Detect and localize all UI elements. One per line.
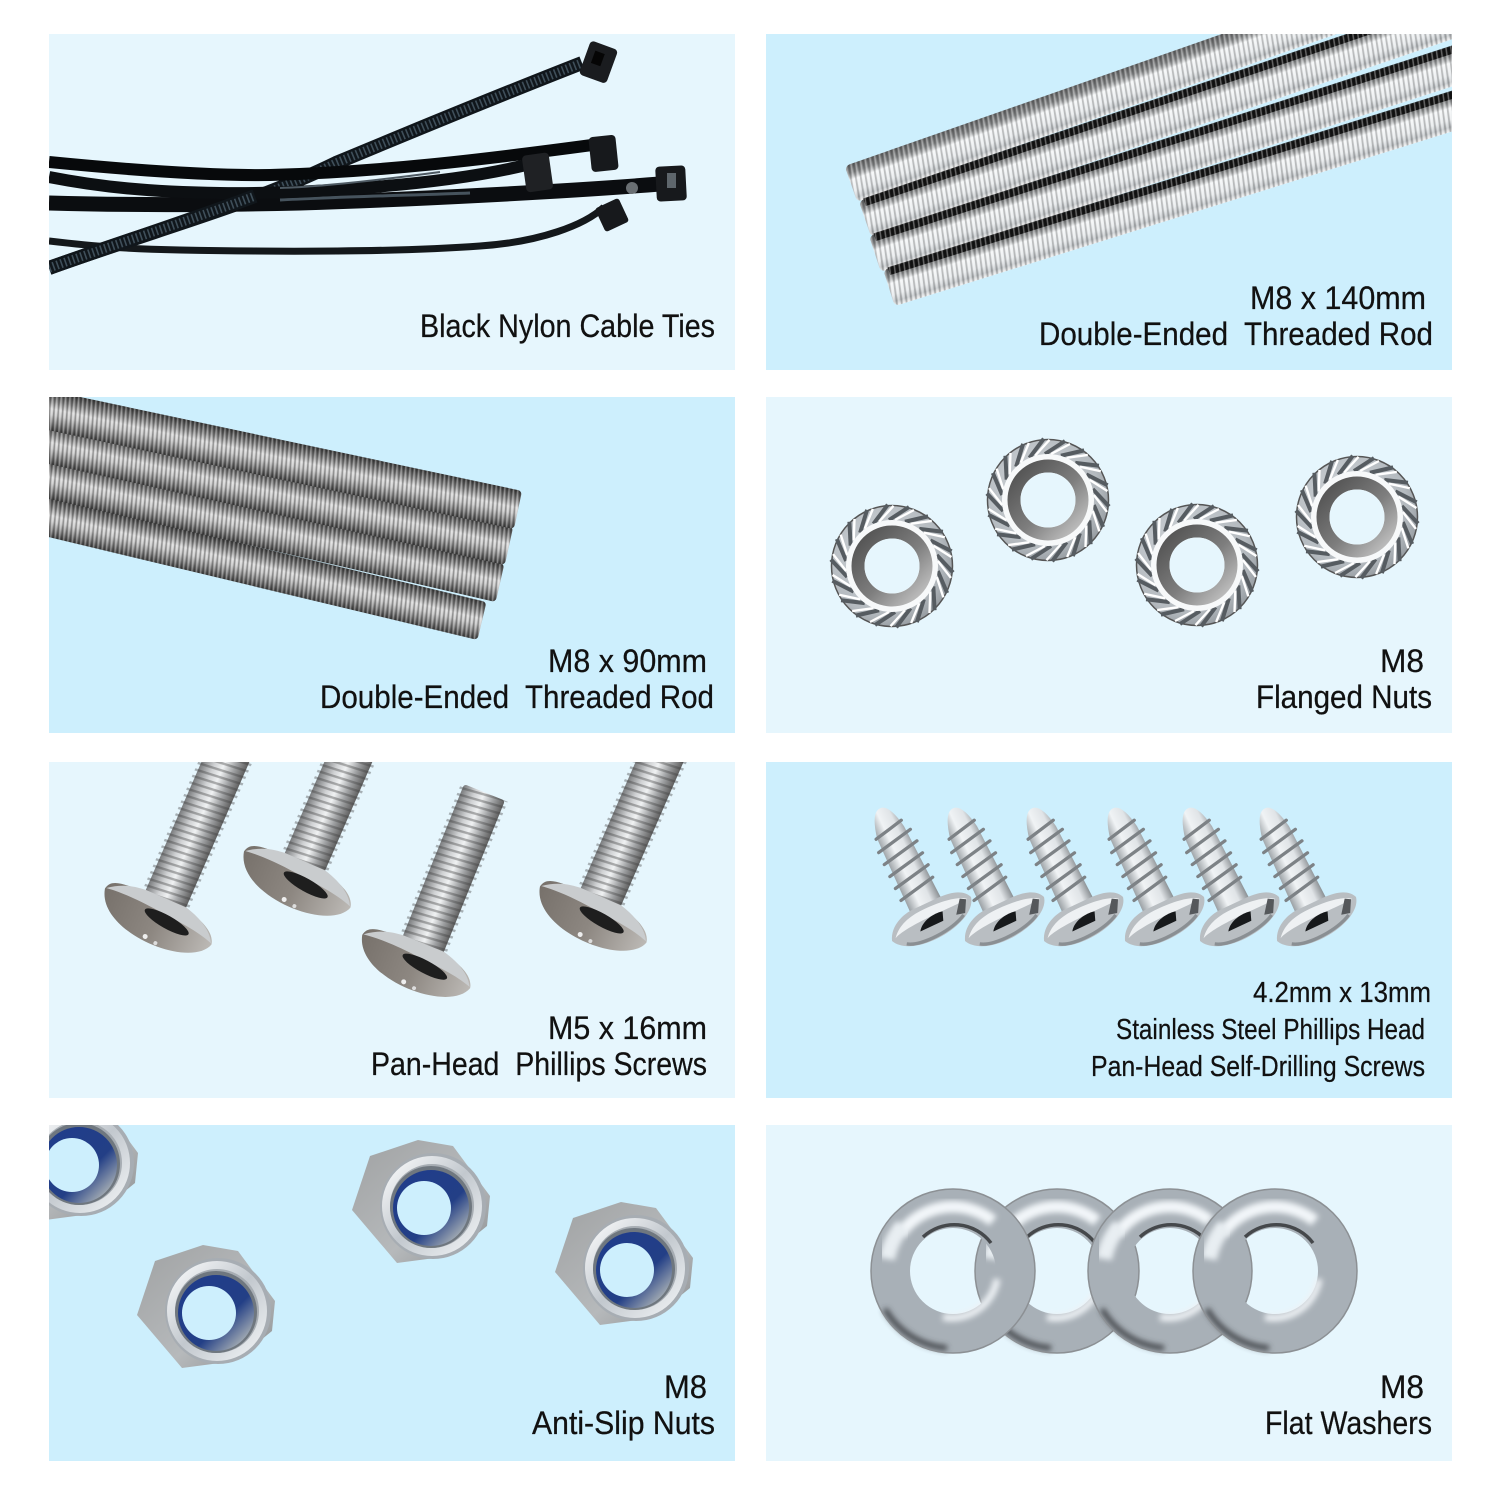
icon: self-drilling screw 5 — [1147, 789, 1289, 956]
icon: flanged nut 4 — [1295, 454, 1419, 580]
icon: flanged nut 1 — [830, 503, 954, 629]
panel background — [766, 762, 1452, 1098]
icon: screw 1 — [104, 762, 252, 953]
label: 4.2mm x 13mm: 4.2mm x 13mm — [1253, 977, 1431, 1009]
icon: screw 3 — [362, 785, 508, 997]
icon: self-drilling screw 2 — [912, 789, 1054, 956]
panel background — [766, 1125, 1452, 1461]
label: Double-Ended Threaded Rod: Double-Ended Threaded Rod — [1039, 316, 1433, 352]
label: M5 x 16mm: M5 x 16mm — [548, 1010, 707, 1046]
icon: screw 2 — [244, 762, 374, 916]
panel background — [49, 397, 735, 733]
panel background — [766, 34, 1452, 370]
panel: self-drilling screws — [766, 762, 1452, 1098]
label: Black Nylon Cable Ties: Black Nylon Cable Ties — [420, 308, 715, 344]
icon: anti-slip nut 4 — [555, 1202, 693, 1325]
label: Flat Washers: Flat Washers — [1265, 1405, 1432, 1441]
icon: flat washer 4 — [1193, 1189, 1357, 1353]
label: Anti-Slip Nuts: Anti-Slip Nuts — [532, 1405, 715, 1441]
panel: M8 x 140mm threaded rod — [766, 34, 1452, 370]
icon: self-drilling screw 6 — [1224, 789, 1366, 956]
panel background — [49, 1125, 735, 1461]
panel background — [766, 397, 1452, 733]
panel background — [49, 34, 735, 370]
panel background — [49, 762, 735, 1098]
icon: flanged nut 3 — [1135, 502, 1259, 628]
panel: M8 flat washers — [766, 1125, 1452, 1461]
label: Stainless Steel Phillips Head: Stainless Steel Phillips Head — [1116, 1014, 1425, 1046]
label: M8: M8 — [1380, 1369, 1424, 1405]
icon: self-drilling screw 1 — [839, 789, 981, 956]
icon: self-drilling screw 3 — [991, 789, 1133, 956]
icon: flat washer 2 — [975, 1189, 1139, 1353]
label: Pan-Head Phillips Screws: Pan-Head Phillips Screws — [371, 1046, 707, 1082]
threaded rods photo — [49, 397, 522, 640]
label: M8: M8 — [664, 1369, 707, 1405]
icon: flat washer 3 — [1088, 1189, 1252, 1353]
label: M8 x 90mm: M8 x 90mm — [548, 643, 707, 679]
label: Flanged Nuts: Flanged Nuts — [1256, 679, 1432, 715]
icon: flat washer 1 — [871, 1189, 1035, 1353]
panel: M8 flanged nuts — [766, 397, 1452, 733]
label: Double-Ended Threaded Rod: Double-Ended Threaded Rod — [320, 679, 714, 715]
icon: flanged nut 2 — [986, 437, 1110, 563]
cable ties photo — [49, 40, 687, 268]
icon: anti-slip nut 1 — [49, 1125, 138, 1220]
nuts photo — [49, 1125, 693, 1368]
label: Pan-Head Self-Drilling Screws: Pan-Head Self-Drilling Screws — [1091, 1051, 1425, 1083]
panel: M5 x 16mm pan-head Phillips screws — [49, 762, 735, 1098]
icon: anti-slip nut 3 — [137, 1245, 275, 1368]
panel: M8 x 90mm threaded rod — [49, 397, 735, 733]
panel: M8 anti-slip nuts — [49, 1125, 735, 1461]
threaded rods photo — [846, 34, 1452, 305]
label: M8 x 140mm: M8 x 140mm — [1250, 280, 1426, 316]
icon: anti-slip nut 2 — [352, 1140, 490, 1263]
panel: black nylon cable ties — [49, 34, 735, 370]
icon: screw 4 — [540, 762, 687, 951]
screws photo — [104, 762, 687, 997]
icon: self-drilling screw 4 — [1072, 789, 1214, 956]
label: M8: M8 — [1380, 643, 1424, 679]
